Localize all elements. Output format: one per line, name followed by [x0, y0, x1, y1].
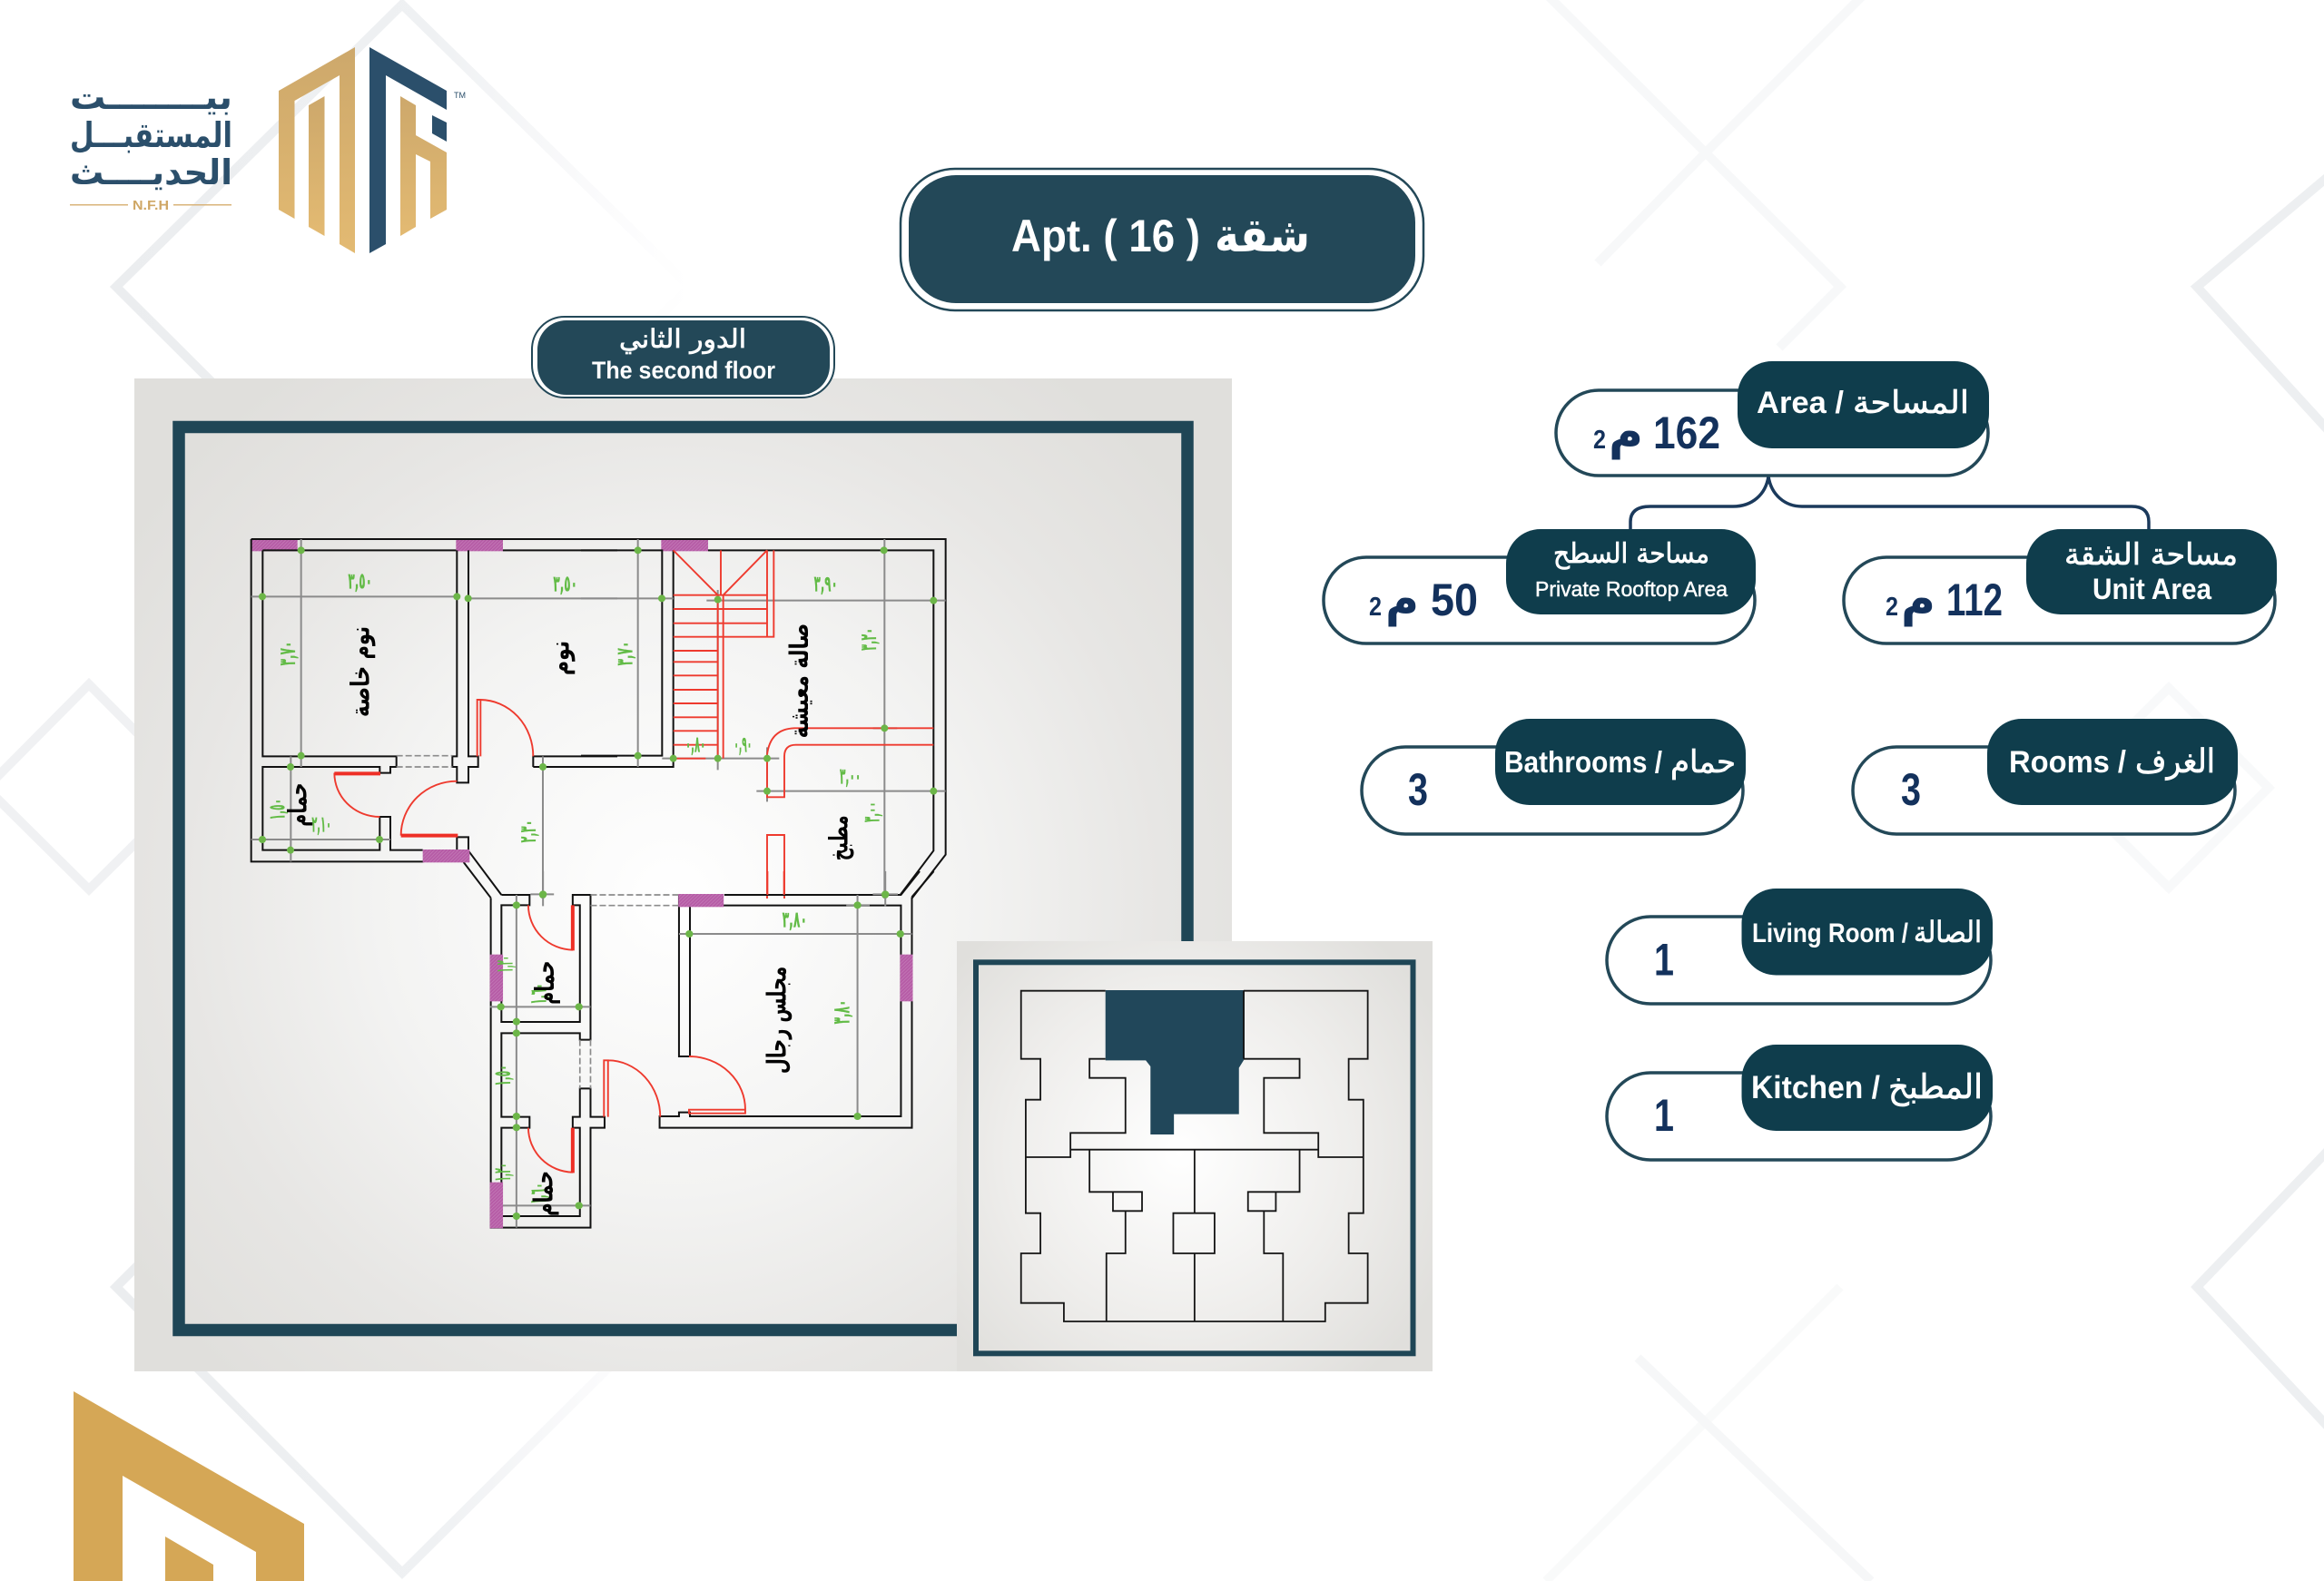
stat: rooms: 3 — [1901, 764, 1921, 815]
stat: unit area: مساحة الشقة — [2064, 536, 2238, 572]
floor plan: bathrooms and men's lounge: ١,٦٠ — [525, 1183, 552, 1204]
stat: area total: المساحة — [1853, 385, 1969, 421]
stat: private rooftop area: مساحة السطح — [1553, 538, 1709, 570]
stat: rooms — [1853, 719, 2238, 834]
floor plan: upper-left rooms: نوم — [546, 641, 576, 675]
stat: private rooftop area: 2 — [1369, 593, 1382, 622]
stat: bathrooms: حمام — [1670, 744, 1736, 781]
logo: company name: المستقبـــل — [70, 115, 232, 155]
floor plan: upper-left rooms: ١,٥٠ — [263, 799, 290, 820]
floor plan: bathrooms and men's lounge: ١,٦٠ — [525, 983, 552, 1005]
logo: company name: بيــــــــت — [70, 77, 232, 117]
floor plan: stairs, living room and kitchen: ٣,٠٠ — [840, 762, 861, 789]
floor plan: bathrooms and men's lounge: حمام — [530, 960, 560, 1005]
floor plan: bathrooms and men's lounge: ١,٢٠ — [491, 956, 517, 972]
floor plan: stairs, living room and kitchen: ٠,٩٠ — [734, 731, 752, 757]
stat: unit area: م — [1901, 573, 1935, 627]
floor plan: bathrooms and men's lounge: ١,٥٠ — [489, 1065, 516, 1086]
stat: area total: 2 — [1593, 426, 1606, 455]
logo: company name: الحديــــث — [70, 152, 232, 192]
stat: living room: Living Room / — [1752, 918, 1909, 948]
stat: living room: 1 — [1654, 935, 1674, 986]
stat: kitchen: المطبخ — [1888, 1067, 1983, 1106]
floor plan: upper-left rooms: حمام — [282, 782, 312, 827]
floor plan: stairs, living room and kitchen: صالة معيشة — [784, 624, 814, 738]
floor label pill: The second floor — [592, 357, 775, 384]
logo: N.F.H building mark — [279, 47, 466, 253]
stat: bathrooms: Bathrooms / — [1504, 745, 1662, 779]
stat: unit area: 2 — [1886, 593, 1898, 622]
floor plan: upper-left rooms — [251, 538, 617, 899]
floor plan: bathrooms and men's lounge — [489, 871, 934, 1228]
floor plan: bathrooms and men's lounge: حمام — [528, 1171, 559, 1216]
floor plan: upper-left rooms: ٢,٣٠ — [515, 820, 541, 842]
floor plan: bathrooms and men's lounge: ١,٢٠ — [489, 1164, 516, 1182]
stat: private rooftop area: م — [1385, 573, 1419, 627]
stat: living room — [1607, 889, 1993, 1004]
stat: area total: Area / — [1757, 386, 1845, 420]
floor plan: stairs, living room and kitchen: مطبخ — [823, 815, 853, 860]
building key plan drawing — [1021, 990, 1368, 1321]
stat: unit area: Unit Area — [2093, 573, 2211, 605]
stat: area total: م — [1609, 406, 1643, 460]
logo mark bottom-left — [74, 1391, 304, 1581]
stat: bathrooms — [1362, 719, 1746, 834]
floor plan: stairs, living room and kitchen — [581, 538, 946, 899]
title pill: Apt. ( 16 ) — [1011, 211, 1200, 261]
stat: private rooftop area: 50 — [1431, 574, 1478, 625]
floor plan frame — [179, 427, 1187, 1331]
title pill: شقة — [1215, 209, 1310, 263]
stat: kitchen — [1607, 1045, 1993, 1160]
stat: area total: 162 — [1653, 408, 1720, 458]
title pill — [901, 169, 1423, 310]
connector lines between area pills — [1630, 476, 2149, 530]
floor plan: bathrooms and men's lounge: ٣,٨٠ — [828, 1000, 855, 1024]
floor plan: bathrooms and men's lounge: مجلس رجال — [762, 967, 793, 1074]
stat: kitchen: 1 — [1654, 1090, 1674, 1141]
floor plan: stairs, living room and kitchen: ٠,٨٠ — [685, 731, 705, 757]
stat: bathrooms: 3 — [1408, 764, 1428, 815]
floor plan: upper-left rooms: ٢,١٠ — [311, 811, 331, 838]
floor plan: stairs, living room and kitchen: ٣,٩٠ — [814, 571, 838, 597]
floor plan: upper-left rooms: نوم خاصة — [346, 626, 376, 717]
floor plan: upper-left rooms: ٣,٥٠ — [553, 571, 577, 597]
stat: unit area: 112 — [1946, 574, 2003, 625]
stat: living room: الصالة — [1914, 915, 1982, 949]
floor label pill — [532, 317, 834, 398]
floor plan: bathrooms and men's lounge: ٣,٨٠ — [783, 907, 807, 933]
floor plan: upper-left rooms: ٣,٧٠ — [274, 642, 300, 665]
stat: private rooftop area: Private Rooftop Area — [1535, 577, 1728, 601]
logo: company name — [70, 77, 232, 213]
stat: area total — [1556, 361, 1989, 476]
panel: building key plan — [957, 941, 1433, 1371]
stat: private rooftop area — [1324, 529, 1756, 643]
floor plan: upper-left rooms: ٣,٥٠ — [348, 567, 372, 594]
logo: company name: N.F.H — [133, 198, 169, 213]
stat: unit area — [1844, 529, 2277, 643]
stat: rooms: الغرف — [2135, 743, 2215, 781]
floor plan: stairs, living room and kitchen: ٣,٢٠ — [855, 628, 881, 651]
logo: N.F.H building mark: TM — [454, 91, 466, 100]
stat: rooms: Rooms / — [2009, 745, 2127, 780]
floor plan: stairs, living room and kitchen: ٣,٧٠ — [612, 642, 638, 665]
floor label pill: الدور الثاني — [619, 324, 746, 354]
stat: kitchen: Kitchen / — [1751, 1070, 1880, 1105]
floor plan: stairs, living room and kitchen: ٣,٠٠ — [858, 801, 884, 822]
panel: floor plan background — [134, 378, 1232, 1371]
